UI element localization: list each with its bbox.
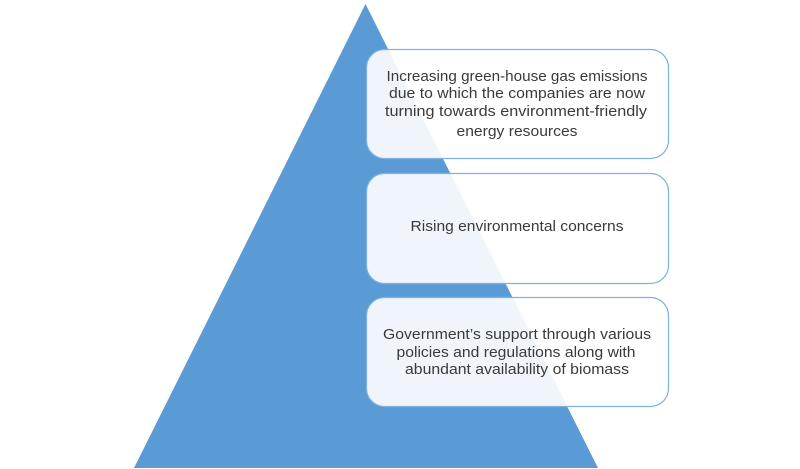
card: environmental concerns: Rising environmental concerns [410, 218, 624, 235]
card: government support: Government’s support through various [383, 326, 651, 343]
card: greenhouse gas emissions: energy resources [456, 123, 578, 140]
card: greenhouse gas emissions: due to which the companies are now [389, 85, 645, 102]
card: government support [366, 298, 668, 406]
card: greenhouse gas emissions [366, 50, 668, 158]
card: government support: policies and regulations along with [396, 344, 636, 361]
card: greenhouse gas emissions: turning towards environment-friendly [385, 103, 648, 120]
pyramid triangle [134, 4, 598, 468]
card: greenhouse gas emissions: Increasing green-house gas emissions [386, 68, 648, 85]
card: government support: abundant availability of biomass [405, 361, 629, 378]
card: environmental concerns [366, 174, 668, 284]
